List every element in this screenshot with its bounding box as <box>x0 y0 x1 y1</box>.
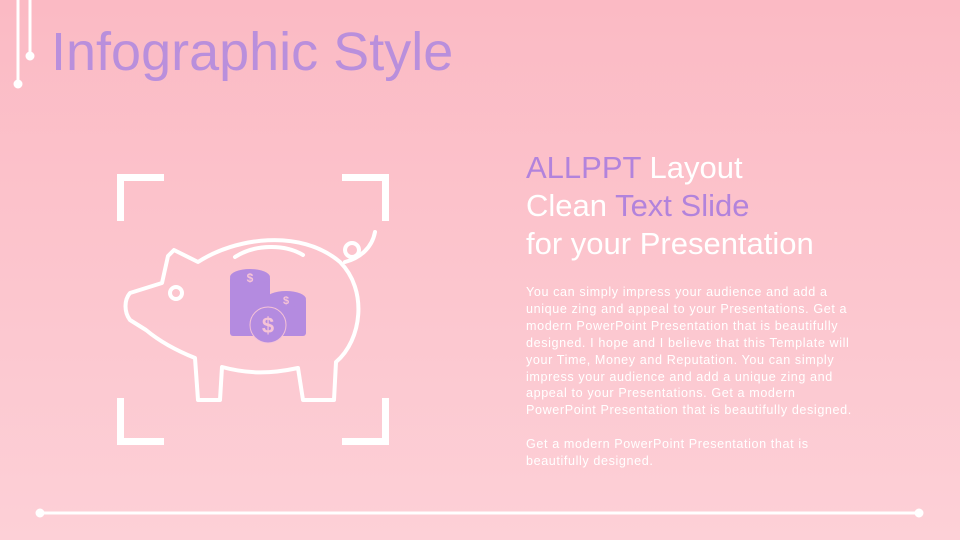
body text: modern PowerPoint Presentation that is beautifully <box>526 319 838 333</box>
icon: piggy bank with coins in frame: $ <box>262 313 274 338</box>
decorative top-left lines <box>14 0 34 88</box>
icon: piggy bank with coins in frame: $ <box>247 271 254 285</box>
title: Infographic Style <box>51 22 453 82</box>
body text: Get a modern PowerPoint Presentation that is <box>526 437 809 451</box>
icon: piggy bank with coins in frame: $ <box>283 295 289 307</box>
coins <box>230 269 306 343</box>
body text <box>526 285 852 468</box>
bottom line <box>36 508 924 518</box>
body text: designed. I hope and I believe that this Template will <box>526 336 849 350</box>
body text: impress your audience and add a unique zing and <box>526 370 833 384</box>
body text: unique zing and appeal to your Presentations. Get a <box>526 302 847 316</box>
frame corners <box>120 178 386 442</box>
body text: your Time, Money and Reputation. You can simply <box>526 353 834 367</box>
icon: piggy bank with coins in frame <box>117 174 389 445</box>
body text: beautifully designed. <box>526 454 653 468</box>
pig outline <box>126 232 375 400</box>
heading: for your Presentation <box>526 226 814 261</box>
heading: ALLPPT Layout <box>526 150 743 185</box>
heading: Clean Text Slide <box>526 188 749 223</box>
body text: appeal to your Presentations. Get a modern <box>526 386 796 400</box>
body text: PowerPoint Presentation that is beautifully designed. <box>526 403 852 417</box>
heading <box>526 150 814 261</box>
body text: You can simply impress your audience and add a <box>526 285 828 299</box>
